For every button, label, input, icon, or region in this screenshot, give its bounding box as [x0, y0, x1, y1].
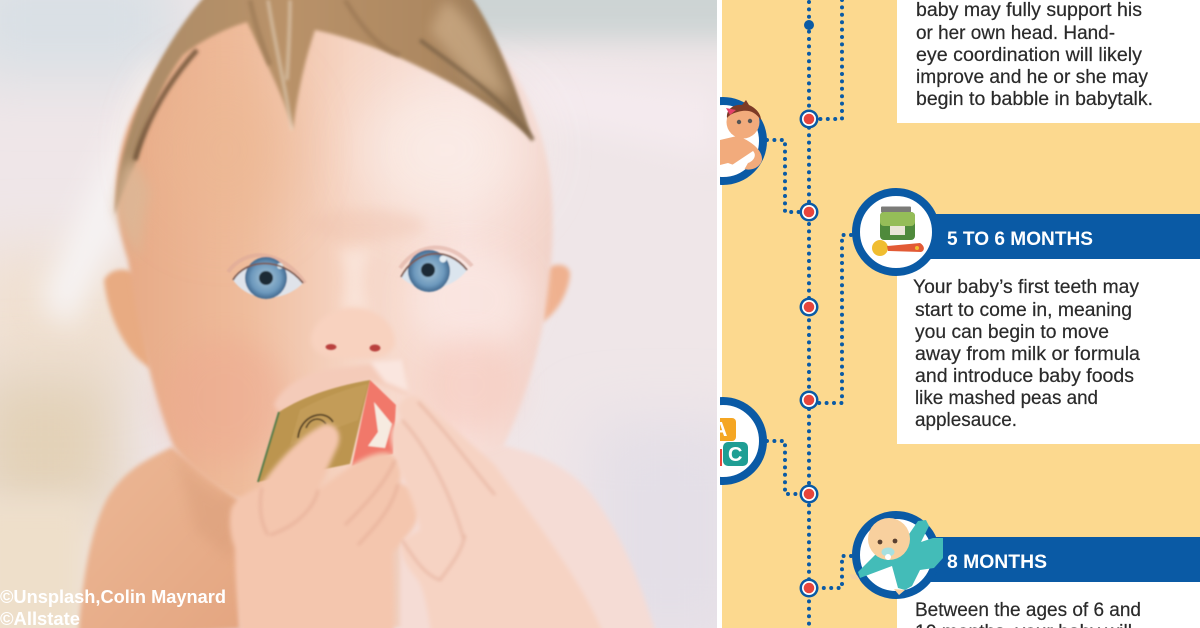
wooden block: [258, 380, 396, 482]
5 to 6 months text: [913, 277, 1140, 431]
top card text: baby may fully support his: [916, 0, 1142, 21]
banner: 5 to 6 months: [930, 214, 1200, 259]
skin tones: forehead glow and cheeks: [160, 75, 530, 462]
5 to 6 months text: applesauce.: [915, 410, 1017, 431]
finger details: [260, 402, 495, 580]
top card text: [916, 0, 1153, 110]
white text card: top: [897, 0, 1200, 123]
icon: crawling baby with pacifier: [849, 515, 943, 595]
timeline small node: [804, 20, 814, 30]
5 to 6 months text: and introduce baby foods: [915, 366, 1134, 387]
photo: baby chewing a wooden block: [0, 0, 750, 628]
banner: 5 to 6 months: 5 TO 6 MONTHS: [947, 229, 1093, 250]
photo background: soft pillow: [0, 0, 750, 628]
shadow under the chin: [190, 484, 216, 519]
left eye: [228, 255, 305, 299]
mouth and lips: [274, 360, 408, 412]
top card text: eye coordination will likely: [916, 45, 1143, 66]
top card text: begin to babble in babytalk.: [916, 89, 1153, 110]
icon: baby in diaper: [720, 97, 767, 185]
5 to 6 months text: away from milk or formula: [915, 344, 1140, 365]
photo credit: [0, 590, 225, 625]
top card text: or her own head. Hand-: [916, 23, 1115, 44]
icon: alphabet blocks: C: [728, 444, 742, 466]
banner: 8 months: [930, 537, 1200, 582]
icon: baby food jar and spoon: [856, 192, 936, 272]
icon: alphabet blocks: A: [713, 419, 727, 441]
panel background: [722, 0, 1200, 628]
right eye: [400, 247, 472, 292]
hair: [114, 0, 533, 260]
5 to 6 months text: you can begin to move: [915, 322, 1109, 343]
right hand over the mouth: [391, 396, 606, 628]
white text card: 8 months: [897, 582, 1200, 628]
left hand holding the block: [230, 424, 420, 628]
top card text: improve and he or she may: [916, 67, 1148, 88]
nose: [311, 250, 395, 358]
5 to 6 months text: Your baby’s first teeth may: [913, 277, 1140, 298]
dotted timeline and connectors: [767, 0, 851, 628]
white text card: 5 to 6 months: [897, 259, 1200, 444]
baby shoulders and chest: [78, 445, 658, 628]
8 months text: Between the ages of 6 and: [915, 600, 1141, 621]
banner: 8 months: 8 MONTHS: [947, 552, 1047, 573]
timeline nodes: [800, 110, 818, 598]
face: [116, 0, 553, 505]
5 to 6 months text: start to come in, meaning: [915, 300, 1132, 321]
icon: alphabet blocks: [720, 397, 767, 485]
ears: [104, 265, 570, 368]
panel: infographic crop: [683, 0, 1200, 628]
photo credit: ©Unsplash,Colin Maynard: [0, 587, 226, 607]
5 to 6 months text: like mashed peas and: [915, 388, 1098, 409]
